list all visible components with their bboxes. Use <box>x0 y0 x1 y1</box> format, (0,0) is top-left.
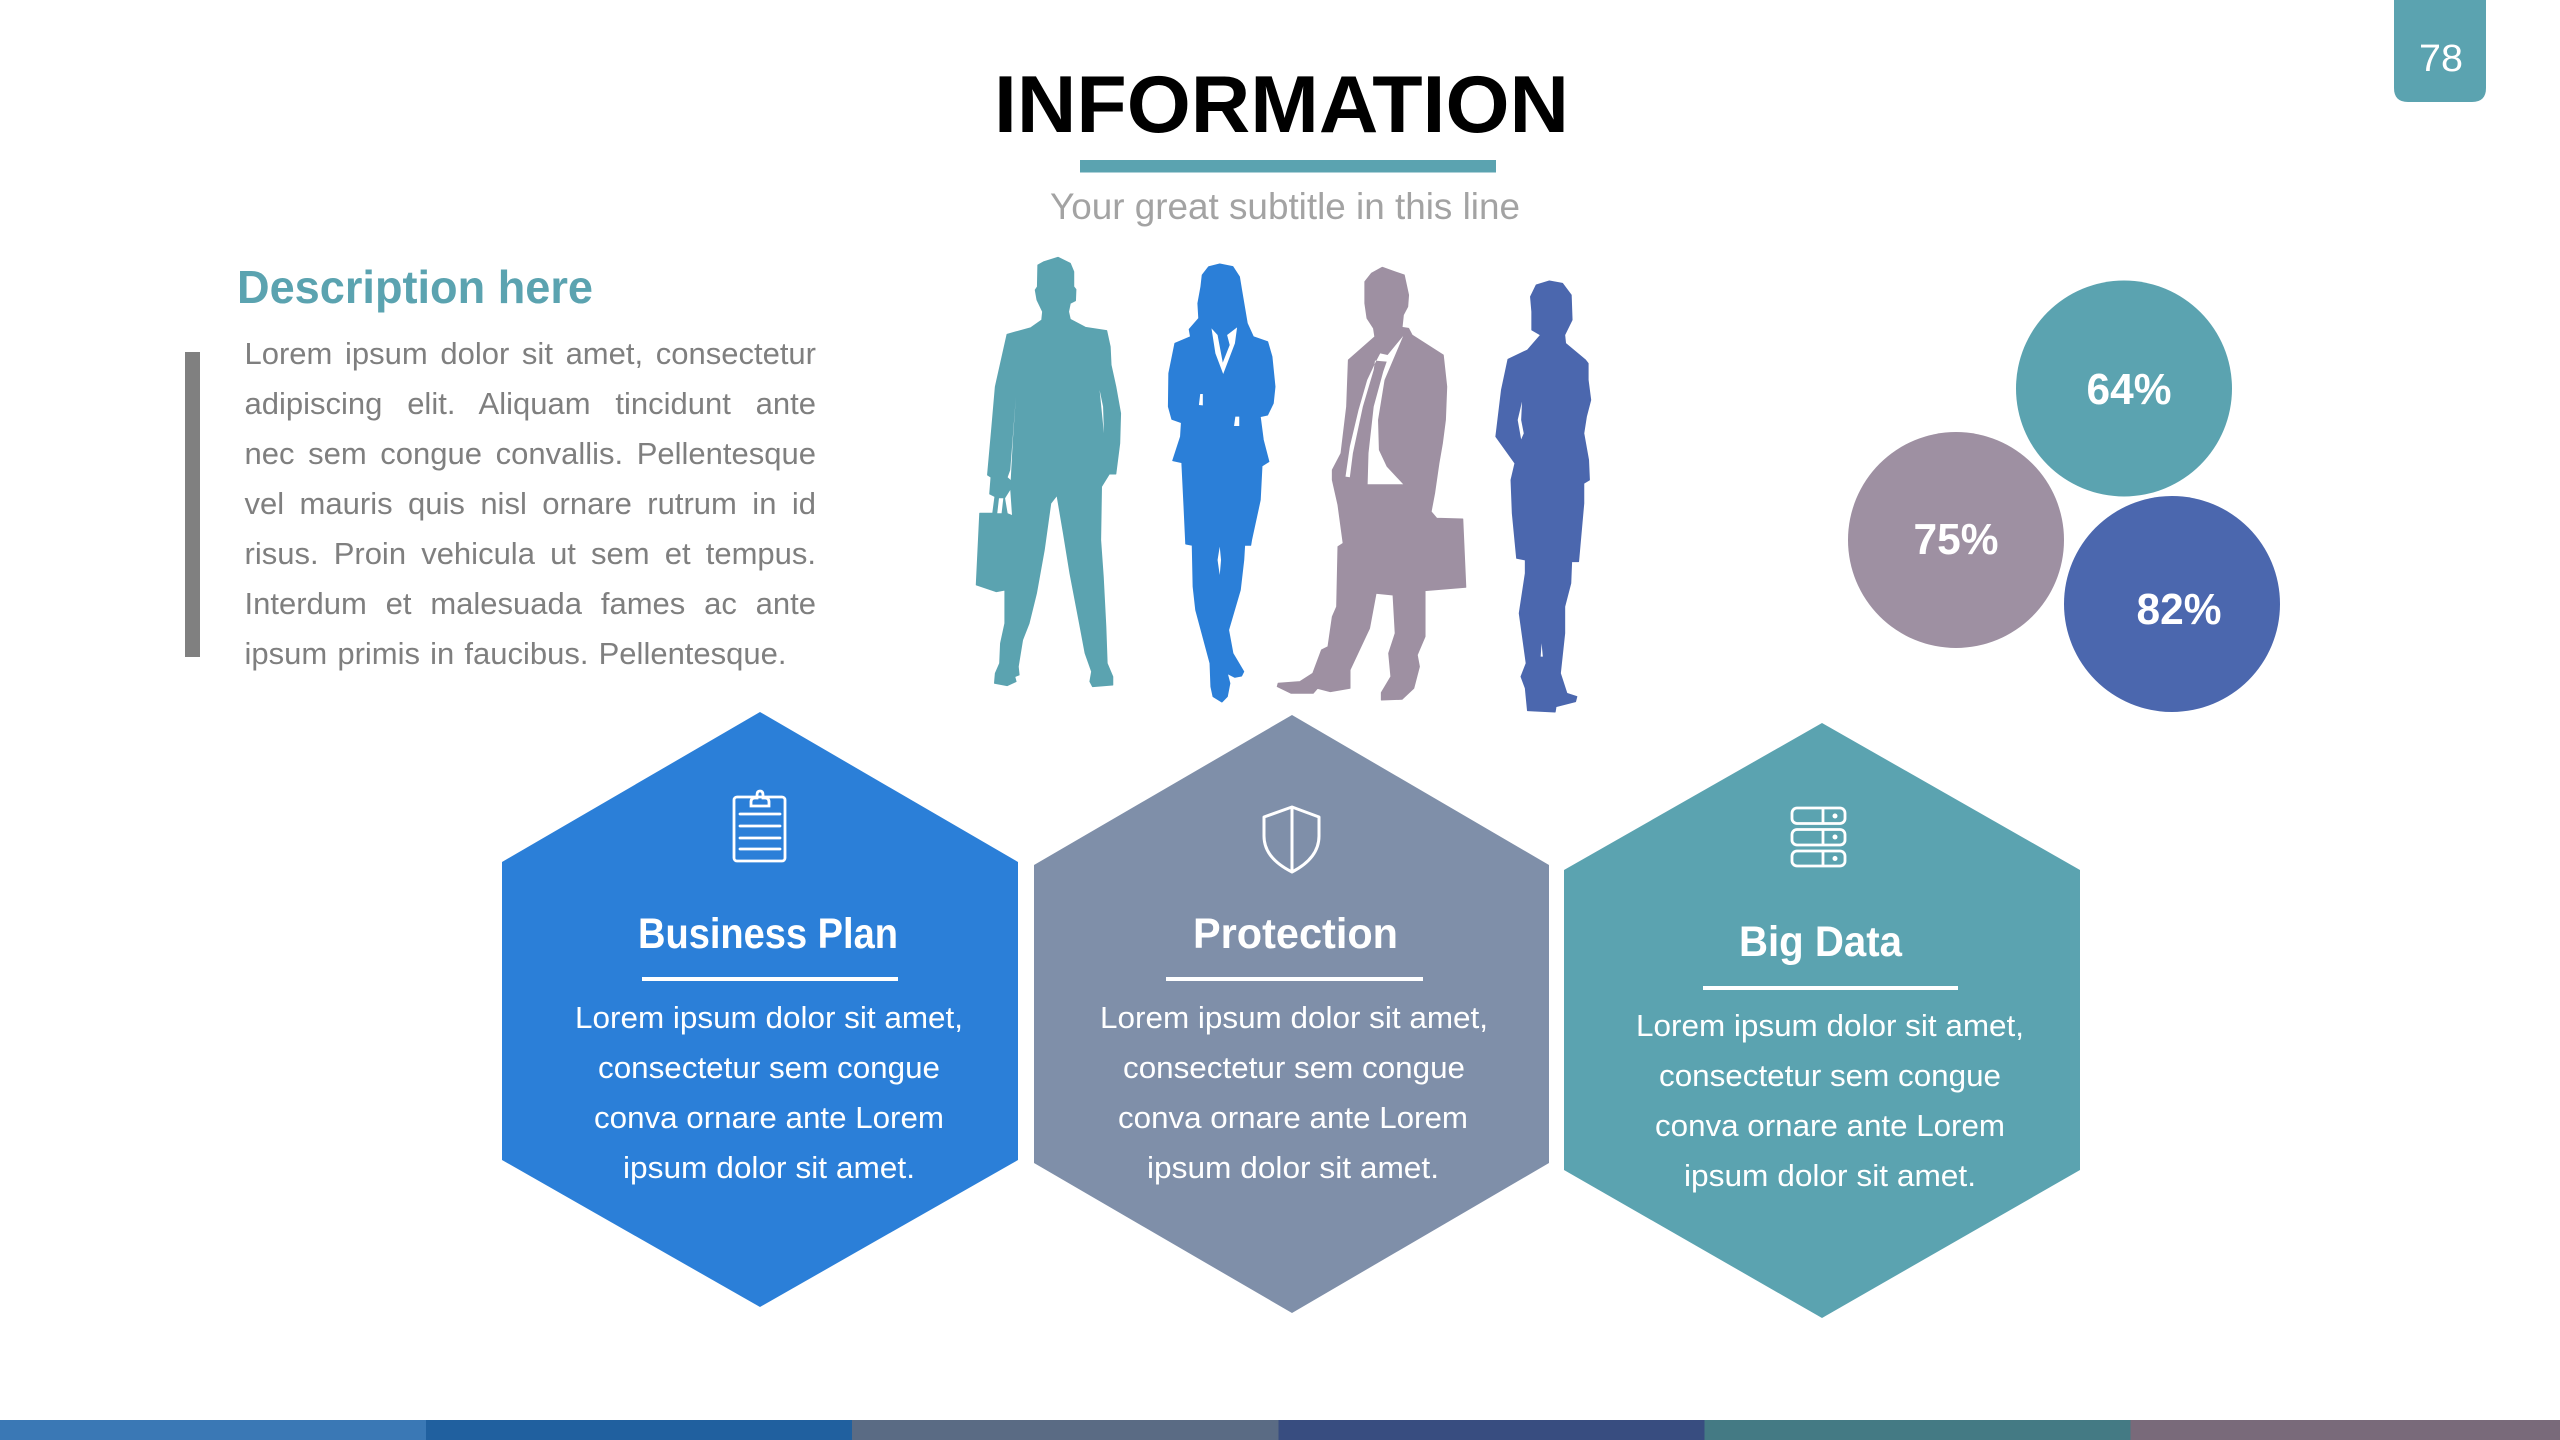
silhouette: woman standing <box>1496 281 1591 712</box>
page number tab: 78 <box>2419 38 2463 80</box>
heading underline <box>642 977 898 981</box>
icon: server stack <box>1792 808 1845 866</box>
description paragraph: Interdum et malesuada fames ac ante <box>244 586 816 621</box>
body text: conva ornare ante Lorem <box>1655 1108 2005 1143</box>
body text: ipsum dolor sit amet. <box>1147 1150 1439 1185</box>
icon: clipboard <box>734 791 785 861</box>
bubble: 64% <box>2016 280 2232 496</box>
bubble: 82% <box>2064 496 2280 712</box>
heading: Protection: Protection <box>1193 910 1398 958</box>
description paragraph: adipiscing elit. Aliquam tincidunt ante <box>244 386 816 421</box>
body text: consectetur sem congue <box>1659 1058 2001 1093</box>
body text <box>1636 1008 2024 1193</box>
page number tab <box>2394 0 2486 102</box>
heading underline <box>1166 977 1423 981</box>
description side bar <box>185 352 200 657</box>
title: INFORMATION <box>994 60 1569 150</box>
title underline <box>1080 160 1496 172</box>
description paragraph: risus. Proin vehicula ut sem et tempus. <box>244 536 816 571</box>
body text <box>1100 1000 1488 1185</box>
bubble: 75%: 75% <box>1914 515 1998 564</box>
description heading: Description here <box>237 261 593 313</box>
body text: consectetur sem congue <box>1123 1050 1465 1085</box>
description paragraph: ipsum primis in faucibus. Pellentesque. <box>244 636 786 671</box>
silhouette: woman with crossed arms <box>1169 264 1275 702</box>
description paragraph <box>244 336 816 671</box>
heading underline <box>1703 986 1958 990</box>
silhouette: man with briefcase <box>1277 267 1466 700</box>
panel: Big Data hexagon <box>1564 723 2080 1318</box>
bubble: 64%: 64% <box>2086 365 2172 414</box>
icon: shield <box>1264 807 1319 872</box>
body text: ipsum dolor sit amet. <box>623 1150 915 1185</box>
heading: Business Plan: Business Plan <box>638 910 898 958</box>
body text: consectetur sem congue <box>598 1050 940 1085</box>
body text: ipsum dolor sit amet. <box>1684 1158 1976 1193</box>
body text: Lorem ipsum dolor sit amet, <box>1100 1000 1488 1035</box>
percentage bubbles <box>1848 280 2280 712</box>
bubble: 75% <box>1848 432 2064 648</box>
description paragraph: Lorem ipsum dolor sit amet, consectetur <box>244 336 816 371</box>
silhouette: man with bag <box>976 257 1120 687</box>
panel: Protection hexagon <box>1034 715 1549 1313</box>
subtitle: Your great subtitle in this line <box>1050 186 1520 227</box>
bottom colour strip <box>0 1420 2560 1440</box>
body text: Lorem ipsum dolor sit amet, <box>1636 1008 2024 1043</box>
bubble: 82%: 82% <box>2136 585 2222 634</box>
body text: conva ornare ante Lorem <box>594 1100 944 1135</box>
heading: Big Data: Big Data <box>1739 918 1903 966</box>
panel: Business Plan hexagon <box>502 712 1018 1307</box>
description paragraph: vel mauris quis nisl ornare rutrum in id <box>244 486 816 521</box>
body text: Lorem ipsum dolor sit amet, <box>575 1000 963 1035</box>
silhouettes of four business people <box>976 257 1591 712</box>
description paragraph: nec sem congue convallis. Pellentesque <box>244 436 816 471</box>
body text <box>575 1000 963 1185</box>
body text: conva ornare ante Lorem <box>1118 1100 1468 1135</box>
